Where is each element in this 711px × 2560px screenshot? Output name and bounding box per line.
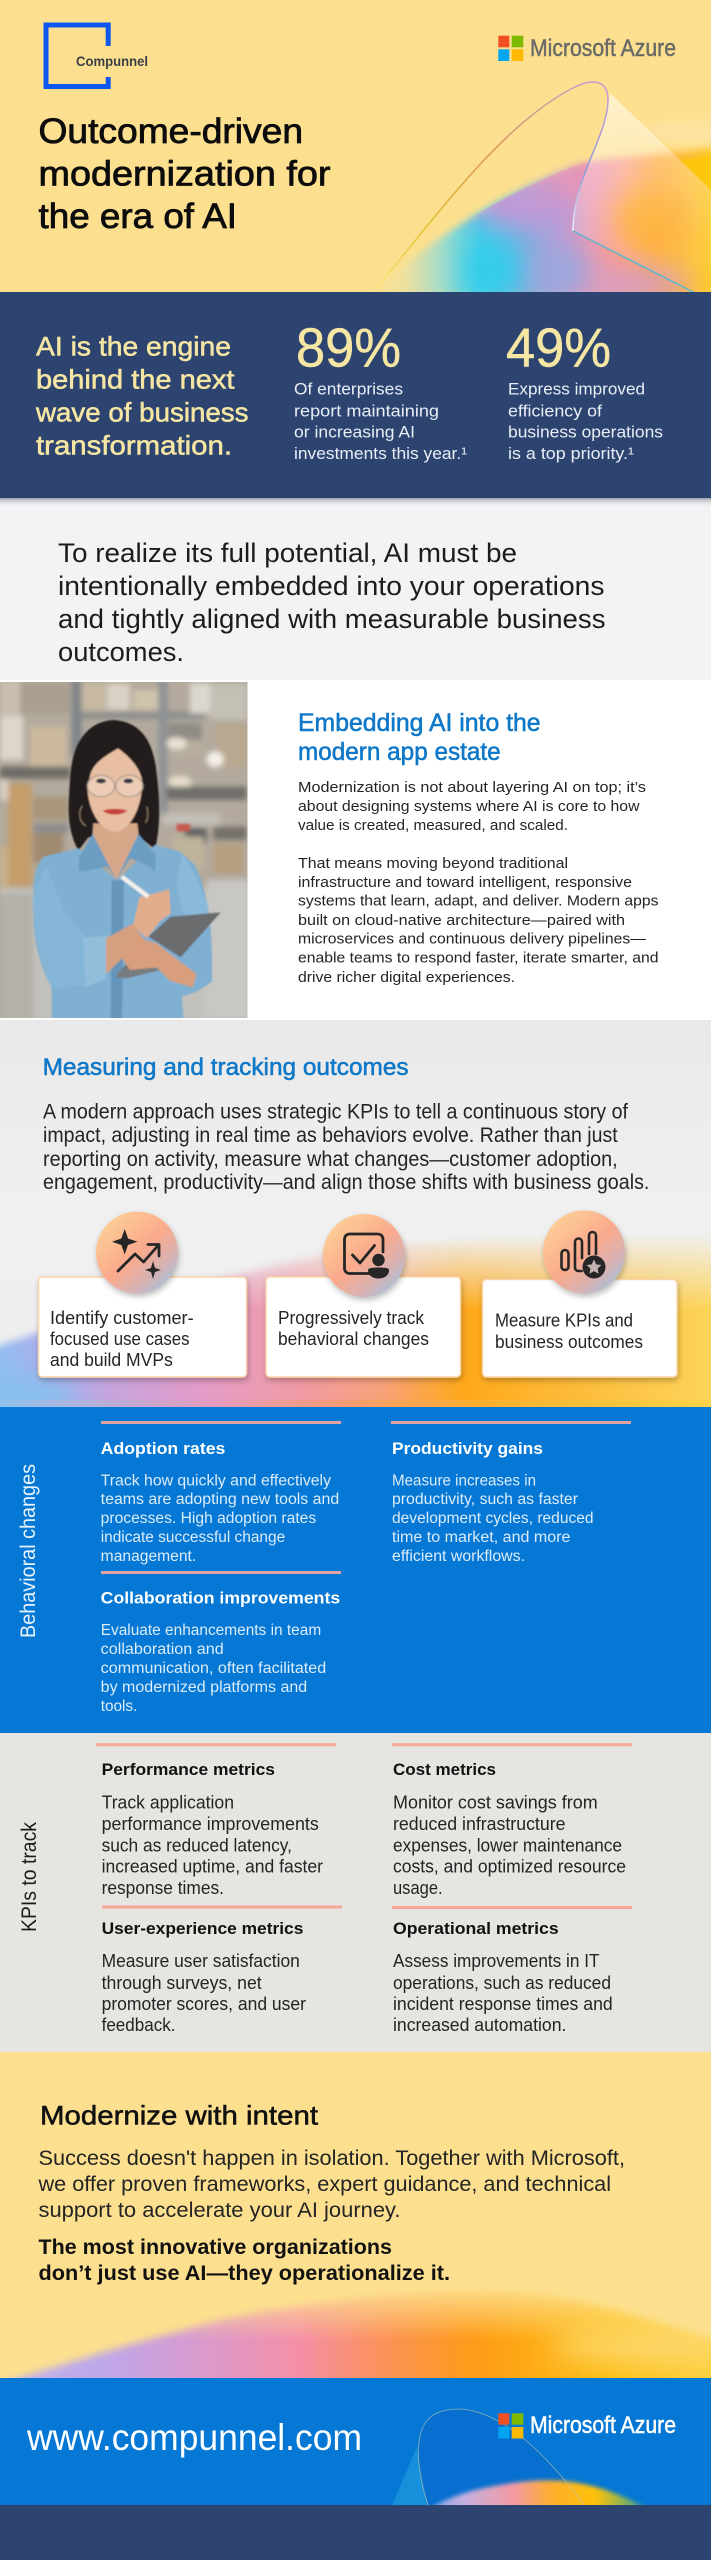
callout: operationalize AI: don’t just use AI—they operationalize it. xyxy=(38,2262,450,2285)
icon: bars with star xyxy=(543,1210,625,1294)
block: performance metrics: performance improvements xyxy=(102,1814,319,1834)
heading: embedding AI: Embedding AI into the xyxy=(298,709,541,737)
panel: KPIs to track xyxy=(0,1733,711,2053)
statistic: 89%: or increasing AI xyxy=(294,423,415,442)
statement: AI is the engine: AI is the engine xyxy=(36,332,231,362)
vertical label: KPIs to track: KPIs to track xyxy=(18,1822,41,1932)
block: operational metrics: operations, such as reduced xyxy=(393,1973,611,1993)
block: adoption rates: indicate successful change xyxy=(101,1529,285,1546)
block: performance metrics: response times. xyxy=(102,1878,224,1898)
block: performance metrics: such as reduced latency, xyxy=(102,1836,292,1856)
block: collaboration improvements xyxy=(101,1571,341,1715)
intro text: intentionally embedded into your operations xyxy=(58,571,604,601)
panel: bottom navy band xyxy=(0,2505,711,2560)
logo: Compunnel xyxy=(46,25,148,86)
body text: measuring outcomes: engagement, productivity—and align those shifts with business goals. xyxy=(43,1171,649,1194)
block: cost metrics: reduced infrastructure xyxy=(393,1814,566,1834)
icon: sparkle with trend arrow xyxy=(96,1212,178,1294)
body text: embedding AI: systems that learn, adapt, and deliver. Modern apps xyxy=(298,892,658,910)
block: collaboration improvements: Collaboration improvements xyxy=(101,1590,340,1608)
statement: AI is the engine: transformation. xyxy=(36,430,232,460)
block: collaboration improvements: collaboration and xyxy=(101,1641,224,1658)
block: user-experience metrics xyxy=(102,1906,342,2035)
block: performance metrics: Track application xyxy=(102,1793,234,1813)
panel: page header xyxy=(0,0,711,301)
block: user-experience metrics: feedback. xyxy=(102,2015,176,2035)
panel: footer website band xyxy=(0,2378,711,2510)
card: track behavioral changes xyxy=(266,1277,460,1377)
block: productivity gains: productivity, such as faster xyxy=(392,1491,578,1508)
card: measure KPIs: Measure KPIs and xyxy=(495,1310,633,1330)
block: productivity gains: development cycles, reduced xyxy=(392,1510,594,1527)
block: productivity gains: time to market, and more xyxy=(392,1529,570,1546)
title: Outcome-driven xyxy=(38,112,303,151)
intro text: To realize its full potential, AI must be xyxy=(58,538,517,568)
panel: modernize with intent xyxy=(0,2052,711,2390)
body text: modernize: we offer proven frameworks, expert guidance, and technical xyxy=(37,2173,611,2196)
intro text xyxy=(58,538,606,667)
heading: modernize with intent: Modernize with intent xyxy=(40,2101,319,2131)
body text: measuring outcomes: reporting on activity, measure what changes—customer adoption, xyxy=(43,1148,618,1171)
block: operational metrics: Assess improvements in IT xyxy=(393,1951,600,1971)
vertical label: behavioral changes: Behavioral changes xyxy=(17,1464,40,1638)
body text: modernize: support to accelerate your AI journey. xyxy=(38,2199,400,2222)
card: identify use cases xyxy=(38,1277,246,1377)
block: performance metrics: increased uptime, and faster xyxy=(102,1857,323,1877)
panel: intro statement xyxy=(0,498,711,680)
statement: AI is the engine xyxy=(35,332,249,460)
panel: behavioral changes xyxy=(0,1407,711,1733)
block: cost metrics: usage. xyxy=(393,1878,443,1898)
card: identify use cases: focused use cases xyxy=(50,1329,190,1349)
title: the era of AI xyxy=(38,197,237,236)
title xyxy=(38,112,331,236)
block: productivity gains xyxy=(391,1421,631,1565)
card: measure KPIs: business outcomes xyxy=(495,1332,643,1352)
block: cost metrics: costs, and optimized resource xyxy=(393,1857,626,1877)
heading: embedding AI: modern app estate xyxy=(298,738,501,766)
statement: AI is the engine: behind the next xyxy=(36,364,235,394)
body text: embedding AI: Modernization is not about layering AI on top; it’s xyxy=(298,779,646,796)
block: cost metrics: Monitor cost savings from xyxy=(393,1793,598,1813)
intro text: outcomes. xyxy=(58,637,184,667)
statistic: 89%: investments this year.¹ xyxy=(294,444,467,463)
block: productivity gains: Measure increases in xyxy=(392,1472,536,1489)
block: user-experience metrics: through surveys, net xyxy=(102,1973,262,1993)
body text: measuring outcomes: A modern approach uses strategic KPIs to tell a continuous story of xyxy=(43,1100,628,1124)
block: adoption rates: Adoption rates xyxy=(101,1440,225,1458)
callout: operationalize AI xyxy=(38,2236,450,2285)
block: operational metrics: increased automation. xyxy=(393,2015,566,2035)
decorative art: footer curve xyxy=(392,2409,650,2510)
body text: embedding AI: infrastructure and toward intelligent, responsive xyxy=(298,874,632,891)
block: adoption rates: processes. High adoption rates xyxy=(101,1510,316,1527)
body text: measuring outcomes xyxy=(43,1100,649,1194)
block: operational metrics: incident response times and xyxy=(393,1994,613,2014)
logo: Microsoft Azure white: Microsoft Azure xyxy=(530,2412,676,2439)
block: user-experience metrics: Measure user satisfaction xyxy=(102,1951,300,1971)
block: collaboration improvements: tools. xyxy=(101,1698,137,1715)
panel: AI statistics band xyxy=(0,292,711,498)
block: productivity gains: efficient workflows. xyxy=(392,1548,525,1565)
decorative rainbow wash xyxy=(0,1238,711,1400)
block: adoption rates xyxy=(101,1421,341,1565)
block: operational metrics: Operational metrics xyxy=(393,1920,559,1938)
card: measure KPIs xyxy=(482,1280,677,1377)
statistic: 89%: report maintaining xyxy=(294,401,439,420)
body text: modernize xyxy=(37,2147,625,2222)
icon: checked box with person xyxy=(323,1214,405,1297)
block: operational metrics xyxy=(392,1906,632,2035)
website address: www.compunnel.com xyxy=(26,2417,362,2458)
heading: embedding AI xyxy=(298,709,541,766)
body text: embedding AI: enable teams to respond faster, iterate smarter, and xyxy=(298,950,658,966)
card: identify use cases: and build MVPs xyxy=(50,1350,173,1370)
decorative art: curled gradient sheet xyxy=(373,82,711,301)
block: performance metrics xyxy=(96,1743,336,1898)
block: cost metrics xyxy=(392,1743,632,1898)
block: collaboration improvements: by modernized platforms and xyxy=(101,1679,307,1696)
callout: operationalize AI: The most innovative organizations xyxy=(38,2236,392,2259)
card: track behavioral changes: behavioral changes xyxy=(278,1329,429,1349)
block: cost metrics: Cost metrics xyxy=(393,1761,496,1779)
photo: woman with tablet in warehouse xyxy=(0,680,250,1020)
statistic: 89% xyxy=(294,316,467,463)
block: adoption rates: Track how quickly and effectively xyxy=(101,1472,331,1489)
logo: Compunnel: Compunnel xyxy=(76,53,148,69)
body text: embedding AI xyxy=(298,779,658,986)
body text: measuring outcomes: impact, adjusting in real time as behaviors evolve. Rather than just xyxy=(43,1124,618,1147)
block: user-experience metrics: User-experience metrics xyxy=(102,1920,303,1938)
logo: Microsoft Azure: Microsoft Azure xyxy=(530,35,676,62)
body text: embedding AI: about designing systems where AI is core to how xyxy=(298,798,640,815)
body text: embedding AI: drive richer digital experiences. xyxy=(298,969,515,986)
statistic: 49%: 49% xyxy=(506,316,611,378)
card: identify use cases: Identify customer- xyxy=(50,1308,194,1328)
block: cost metrics: expenses, lower maintenance xyxy=(393,1836,622,1856)
heading: measuring outcomes: Measuring and tracking outcomes xyxy=(43,1054,409,1081)
statistic: 49%: efficiency of xyxy=(508,401,602,420)
body text: embedding AI: built on cloud-native architecture—paired with xyxy=(298,912,625,929)
statistic: 49%: Express improved xyxy=(508,380,645,399)
statistic: 49%: business operations xyxy=(508,423,663,442)
figure: woman xyxy=(33,720,221,1019)
block: collaboration improvements: Evaluate enhancements in team xyxy=(101,1622,321,1639)
card: track behavioral changes: Progressively track xyxy=(278,1308,425,1328)
block: performance metrics: Performance metrics xyxy=(102,1761,275,1779)
statement: AI is the engine: wave of business xyxy=(35,398,249,428)
statistic: 49%: is a top priority.¹ xyxy=(508,444,634,463)
block: adoption rates: management. xyxy=(101,1548,196,1565)
statistic: 89%: Of enterprises xyxy=(294,380,403,399)
body text: embedding AI: That means moving beyond traditional xyxy=(298,855,568,872)
block: user-experience metrics: promoter scores, and user xyxy=(102,1994,306,2014)
body text: embedding AI: value is created, measured, and scaled. xyxy=(298,817,568,834)
title: modernization for xyxy=(38,155,331,194)
body text: modernize: Success doesn't happen in isolation. Together with Microsoft, xyxy=(38,2147,625,2170)
intro text: and tightly aligned with measurable business xyxy=(58,604,606,634)
block: collaboration improvements: communication, often facilitated xyxy=(101,1660,326,1677)
block: productivity gains: Productivity gains xyxy=(392,1440,543,1458)
block: adoption rates: teams are adopting new tools and xyxy=(101,1491,339,1508)
body text: embedding AI: microservices and continuous delivery pipelines— xyxy=(298,930,646,948)
panel: embedding AI xyxy=(0,680,711,1020)
statistic: 89%: 89% xyxy=(296,316,401,378)
panel: measuring and tracking outcomes xyxy=(0,1020,711,1426)
statistic: 49% xyxy=(506,316,663,463)
decorative rainbow wash xyxy=(6,2290,711,2378)
